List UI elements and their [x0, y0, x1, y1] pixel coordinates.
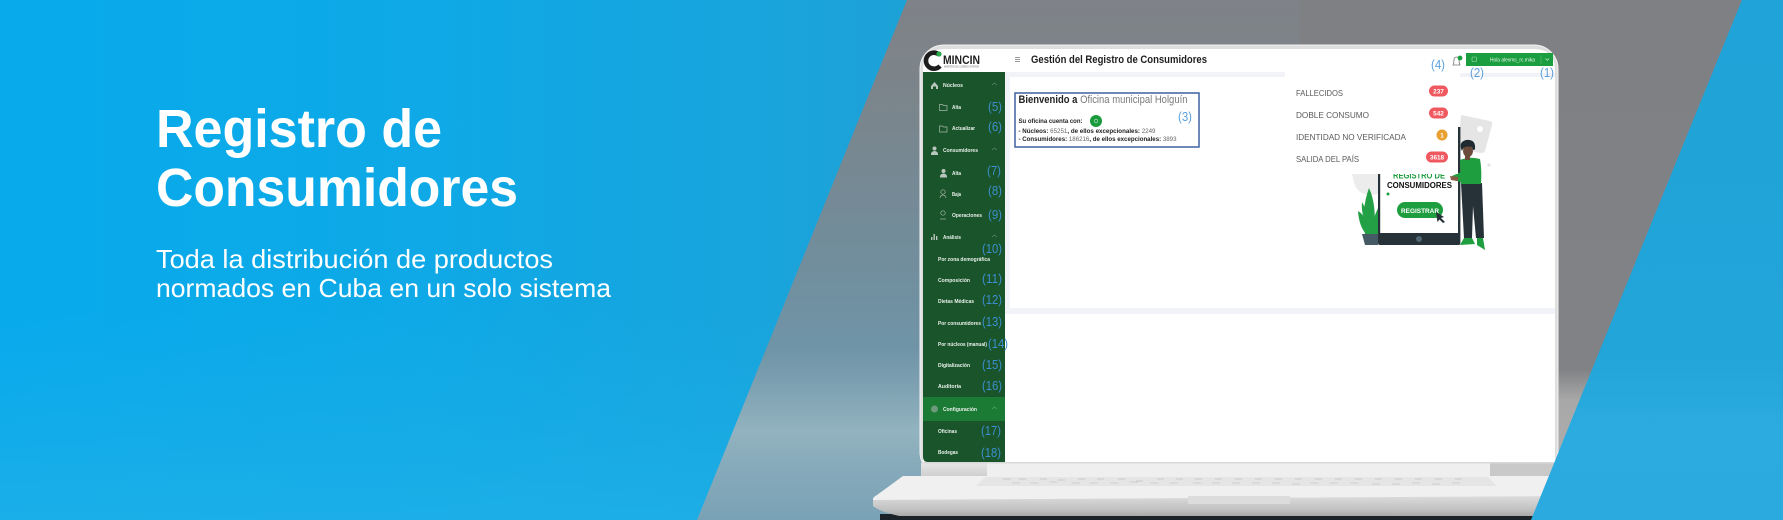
- sidebar menu labels: Operaciones: [952, 213, 982, 219]
- alert: fallecidos: [1296, 86, 1448, 98]
- sidebar menu labels: Análisis: [943, 235, 961, 241]
- sidebar menu labels: Dietas Médicas: [938, 299, 974, 305]
- alert: salida del país: 3618: [1430, 154, 1445, 161]
- icon: menu: [1015, 58, 1020, 62]
- tablet: [1378, 127, 1460, 245]
- sidebar icons: [931, 82, 947, 412]
- sidebar menu labels: Actualizar: [952, 126, 976, 132]
- numbered callouts: (9): [988, 207, 1002, 222]
- sidebar menu labels: Alta: [952, 171, 962, 177]
- sidebar menu labels: Oficinas: [938, 429, 957, 435]
- welcome card: - Consumidores: 186216, de ellos excepcionales: 3893: [1018, 136, 1177, 143]
- sidebar menu labels: Consumidores: [943, 148, 978, 154]
- background: left blue area: [0, 0, 960, 520]
- app title: Gestión del Registro de Consumidores: [1031, 54, 1207, 66]
- screen: [923, 49, 1555, 462]
- title: Registro de: [156, 99, 442, 159]
- alert: doble consumo: DOBLE CONSUMO: [1296, 110, 1369, 120]
- sidebar menu labels: Digitalización: [938, 363, 970, 369]
- numbered callouts: (5): [988, 99, 1002, 114]
- sidebar menu labels: Núcleos: [943, 83, 963, 89]
- sidebar active row: Configuración: [923, 397, 1005, 421]
- numbered callouts: (13): [982, 314, 1002, 329]
- laptop hinge: [921, 462, 1558, 476]
- numbered callouts: (3): [1178, 109, 1192, 124]
- numbered callouts: (11): [982, 271, 1002, 286]
- numbered callouts: (14): [988, 336, 1008, 351]
- content gutters: [1005, 72, 1555, 314]
- numbered callouts: (15): [982, 357, 1002, 372]
- welcome card: - Núcleos: 65251, de ellos excepcionales: 2249: [1018, 128, 1156, 135]
- person: [1450, 140, 1485, 250]
- alert: salida del país: SALIDA DEL PAÍS: [1296, 154, 1359, 164]
- numbered callouts: (17): [981, 423, 1001, 438]
- sidebar menu labels: Baja: [952, 192, 962, 198]
- register button: REGISTRAR: [1401, 208, 1439, 215]
- background: grey diagonal panel: [697, 0, 1742, 520]
- sidebar chevrons: [992, 83, 997, 409]
- numbered callouts: (10): [982, 241, 1002, 256]
- sidebar menu labels: Composición: [938, 278, 970, 284]
- sidebar menu labels: Por zona demográfica: [938, 257, 991, 263]
- subtitle: [156, 246, 612, 303]
- user button: [1466, 53, 1553, 66]
- sidebar menu labels: Por consumidores: [938, 321, 981, 327]
- numbered callouts: (7): [987, 163, 1001, 178]
- alert: doble consumo: [1296, 108, 1448, 120]
- sidebar menu labels: Bodegas: [938, 450, 958, 456]
- laptop: [873, 45, 1560, 520]
- numbered callouts: (16): [982, 378, 1002, 393]
- welcome card: Bienvenido a Oficina municipal Holguín: [1018, 94, 1188, 106]
- alert list panel: [1288, 78, 1458, 174]
- numbered callouts: (6): [988, 119, 1002, 134]
- illustration background shapes: [1352, 115, 1492, 195]
- subtitle: Toda la distribución de productos: [156, 246, 553, 274]
- icon: notification bell: [1453, 56, 1462, 65]
- alert: fallecidos: 237: [1433, 88, 1444, 95]
- sidebar: [923, 72, 1005, 462]
- alert: identidad no verificada: IDENTIDAD NO VERIFICADA: [1296, 132, 1406, 142]
- welcome card: Su oficina cuenta con:: [1018, 118, 1082, 125]
- sidebar menu labels: [938, 83, 991, 456]
- sidebar menu labels: Alta: [952, 105, 962, 111]
- sidebar menu labels: Configuración: [943, 407, 977, 413]
- alert: salida del país: [1296, 152, 1448, 164]
- sidebar menu labels: Por núcleos (manual): [938, 342, 987, 348]
- illustration: register consumers: [1352, 115, 1492, 250]
- welcome card: [1015, 93, 1199, 147]
- logo: MINCIN: [926, 51, 980, 69]
- title: Consumidores: [156, 158, 518, 218]
- numbered callouts: (8): [988, 183, 1002, 198]
- numbered callouts: (18): [981, 445, 1001, 460]
- logo: MINCIN: MINCIN: [943, 55, 980, 67]
- logo: MINCIN: MINISTERIO DEL COMERCIO INTERIOR: [944, 66, 979, 68]
- laptop base: [873, 476, 1560, 520]
- numbered callouts: [981, 57, 1554, 460]
- title: [156, 99, 518, 218]
- numbered callouts: (12): [982, 292, 1002, 307]
- alert: identidad no verificada: 1: [1440, 132, 1444, 139]
- numbered callouts: (2): [1470, 65, 1484, 80]
- alert: doble consumo: 542: [1433, 110, 1444, 117]
- numbered callouts: (4): [1431, 57, 1445, 72]
- user button: Hola alexms_rc.mika: [1490, 58, 1535, 64]
- sidebar background: [923, 72, 1005, 462]
- background: right blue diagonal: [1531, 0, 1783, 520]
- plant: [1358, 188, 1378, 245]
- laptop lid frame: [920, 45, 1558, 476]
- screen white background: [923, 49, 1555, 462]
- sidebar menu labels: Auditoría: [938, 384, 962, 390]
- tablet: CONSUMIDORES: [1387, 181, 1453, 190]
- status icon: [1090, 115, 1102, 127]
- numbered callouts: (1): [1540, 65, 1554, 80]
- subtitle: normados en Cuba en un solo sistema: [156, 275, 612, 303]
- alert: identidad no verificada: [1296, 130, 1448, 142]
- tablet: REGISTRO DE: [1393, 170, 1445, 180]
- alert: fallecidos: FALLECIDOS: [1296, 88, 1343, 98]
